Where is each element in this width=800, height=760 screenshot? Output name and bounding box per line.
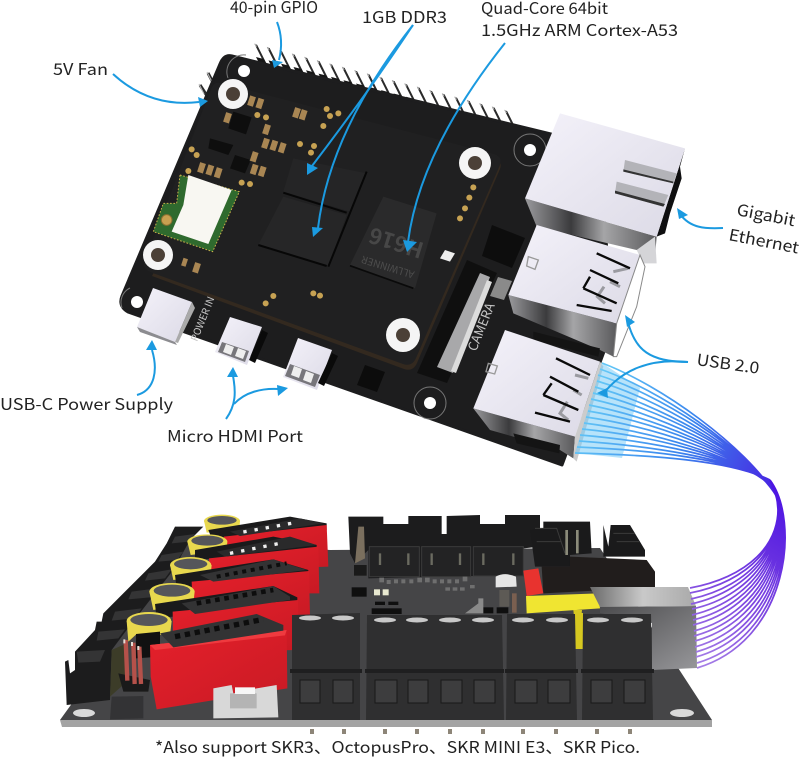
tall pin stack (354, 527, 367, 576)
right upper details (535, 528, 640, 553)
label: Gigabit Ethernet (727, 196, 800, 258)
gray adapter block (590, 587, 697, 670)
white button (496, 574, 517, 587)
carrier PCB (121, 56, 612, 465)
red jumper (523, 568, 543, 596)
small black ICs (352, 587, 508, 614)
back headers in zoomed coordinates (348, 515, 655, 623)
camera label: CAMERA (462, 299, 499, 353)
driver 5 assembly (204, 515, 328, 570)
solder pins under board (310, 729, 632, 734)
H616 SoC chip: ALLWINNER (359, 253, 416, 283)
arrow: 5V Fan (113, 74, 208, 107)
small IC on carrier (357, 365, 385, 392)
driver 3 assembly (170, 557, 310, 620)
screw terminal block 3 (505, 614, 578, 720)
lower wires (690, 480, 785, 668)
socket pins (380, 553, 513, 565)
driver 4 assembly (187, 534, 319, 593)
arrow: 40-pin GPIO (272, 22, 283, 68)
top board: Raspberry Pi style carrier (121, 45, 612, 465)
camera FFC connector (417, 260, 497, 383)
micro HDMI port 2 (283, 338, 338, 390)
screw terminal block 2 (365, 615, 504, 720)
label: 1GB DDR3: 1GB DDR3 (362, 4, 447, 28)
blue callout arrows (113, 22, 723, 419)
wifi module shield (172, 175, 232, 244)
screw terminal block 1 (290, 613, 362, 720)
label: Gigabit Ethernet: Gigabit (735, 196, 798, 231)
expansion header housing (348, 515, 540, 578)
upper wires (575, 363, 777, 497)
footnote: *Also support SKR3、OctopusPro、SKR MINI E3、SKR Pico. (155, 734, 640, 758)
QR code block (490, 277, 512, 300)
small gray parts row (379, 577, 475, 591)
button parts (499, 590, 517, 613)
mounting holes (73, 709, 694, 717)
5V fan pins (199, 72, 218, 102)
screw terminal block 4 (581, 614, 654, 720)
PCB front edge (60, 720, 712, 727)
mounting holes on carrier (121, 55, 546, 419)
silkscreen wedge (465, 598, 483, 613)
translucent glow at the USB end (575, 363, 640, 458)
arrow: 1GB DDR3 to first chip (307, 25, 413, 175)
compute module side (152, 154, 501, 370)
gigabit ethernet jack (525, 113, 685, 263)
upper USB jack (508, 225, 645, 357)
stepper area in zoomed coordinates (65, 515, 328, 719)
header sockets (369, 547, 523, 577)
arrow: USB-C power (137, 340, 157, 395)
arrow: Micro HDMI second port (234, 385, 288, 404)
status LEDs (374, 589, 389, 595)
bottom board: SKR mainboard (60, 515, 712, 734)
RAM chip 1 (283, 158, 367, 212)
label: 5V Fan: 5V Fan (53, 56, 108, 80)
wifi module PCB (153, 175, 239, 252)
CB1 compute module (144, 83, 501, 365)
arrow: USB lower (597, 361, 688, 398)
arrow: Micro HDMI first port (226, 367, 238, 419)
network and USB connectors (473, 113, 685, 462)
arrow: Quad-Core CPU (403, 43, 505, 252)
small black block (110, 696, 143, 719)
ribbon cable of blue to purple wires (575, 363, 785, 668)
yellow jumper stem (575, 613, 583, 649)
label: USB 2.0: USB 2.0 (695, 346, 761, 379)
power-in label: POWER IN (186, 294, 217, 343)
capacitor and header pins of driver 1 (118, 612, 172, 692)
white LED (440, 250, 455, 262)
yellow T jumper (526, 593, 600, 623)
label: Gigabit Ethernet: Ethernet (727, 221, 800, 258)
micro HDMI port 1 (215, 317, 268, 365)
left JST connector column (65, 527, 203, 705)
40-pin GPIO header (253, 45, 518, 153)
small capacitors (181, 95, 308, 274)
H616 SoC chip: H616 (365, 220, 427, 267)
RAM chip 2 (258, 197, 347, 267)
arrow: USB upper (625, 315, 688, 362)
label: CPU: 1.5GHz ARM Cortex-A53 (481, 17, 678, 41)
arrow: 1GB DDR3 to second chip (312, 25, 413, 237)
label: USB-C Power Supply: USB-C Power Supply (0, 391, 174, 415)
USB-C connector (137, 288, 195, 345)
lower right header (542, 557, 655, 593)
driver 2 assembly (149, 583, 299, 652)
arrow: Gigabit Ethernet (677, 208, 723, 228)
DSI connector pads (482, 225, 525, 268)
antenna socket (161, 215, 172, 225)
lower USB jack (473, 330, 603, 462)
mainboard PCB (60, 540, 712, 720)
H616 SoC chip (350, 197, 437, 288)
label: Micro HDMI Port: Micro HDMI Port (167, 423, 303, 447)
module standoff rings (143, 79, 491, 352)
module details in zoomed coordinates (153, 95, 476, 306)
dark ICs (208, 112, 252, 173)
white JST connector (213, 685, 278, 718)
long pins (567, 530, 577, 555)
label: CPU (481, 0, 678, 41)
red stepper driver 1 (150, 614, 287, 709)
gold test pads (185, 106, 476, 306)
right upper headers (530, 522, 645, 567)
